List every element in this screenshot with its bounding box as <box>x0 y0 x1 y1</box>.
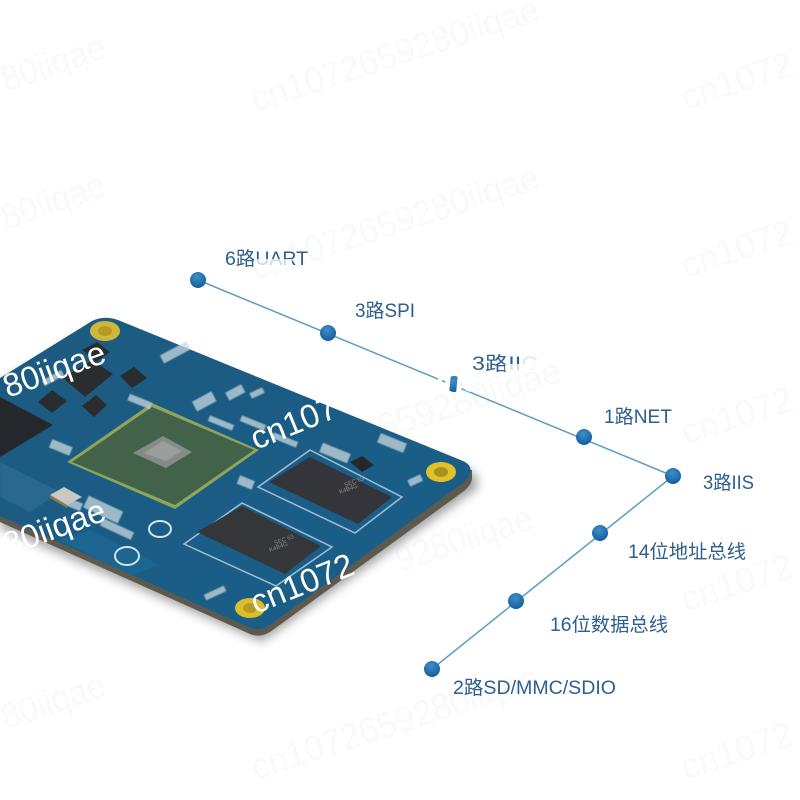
faint background watermarks: cn1072 <box>676 43 798 118</box>
port labels: 16位数据总线 <box>550 614 668 636</box>
port labels: 3路IIS <box>703 472 754 494</box>
RAM chip 2: SEC 63 <box>274 534 296 547</box>
left memory chip <box>0 397 53 457</box>
power inductors <box>38 342 147 417</box>
RAM chip 1: SEC 63 <box>344 476 366 489</box>
mounting holes <box>90 321 456 618</box>
white watermark overlays: 80iiqae <box>0 333 110 405</box>
processor BGA chip <box>67 403 259 509</box>
RAM chip 2 <box>184 503 332 586</box>
port labels: 14位地址总线 <box>628 541 746 563</box>
white watermark overlays: 80iiqae <box>0 491 110 563</box>
port labels: 3路IIC <box>472 353 538 375</box>
connector lines <box>198 280 673 669</box>
port labels: 6路UART <box>225 248 308 270</box>
faint background watermarks: 9280iiqae <box>390 497 538 580</box>
faint background watermarks: cn1072 <box>676 545 798 620</box>
silkscreen logos <box>115 521 171 565</box>
faint background watermarks: cn1072 <box>676 378 798 453</box>
circuit board photo <box>0 318 478 642</box>
board shadow <box>0 325 478 642</box>
node markers <box>190 272 681 677</box>
copper traces left <box>0 462 160 575</box>
faint background watermarks: cn1072 <box>676 211 798 286</box>
port labels <box>225 248 754 699</box>
port labels: 3路SPI <box>355 300 415 322</box>
RAM chip 1: K4B4G <box>339 484 359 496</box>
crystal oscillator <box>50 487 82 508</box>
board edge <box>0 470 472 636</box>
faint background watermarks: cn1072659280iiqae <box>246 656 544 788</box>
RAM chip 2: K4B4G <box>269 542 289 554</box>
faint background watermarks: 72659280iiqae <box>335 350 566 460</box>
faint background watermarks: cn1072659280iiqae <box>246 156 544 288</box>
small components <box>42 341 423 600</box>
white watermark overlays: cn1072 <box>245 546 359 620</box>
port labels: 2路SD/MMC/SDIO <box>453 677 616 699</box>
RAM chip 1 <box>258 450 402 533</box>
black transistor <box>350 456 374 472</box>
board surface <box>0 318 471 629</box>
port labels: 1路NET <box>604 406 672 428</box>
white watermark overlays: cn107 <box>245 388 342 456</box>
white watermark overlays <box>0 259 542 620</box>
faint background watermarks: cn1072 <box>676 713 798 788</box>
